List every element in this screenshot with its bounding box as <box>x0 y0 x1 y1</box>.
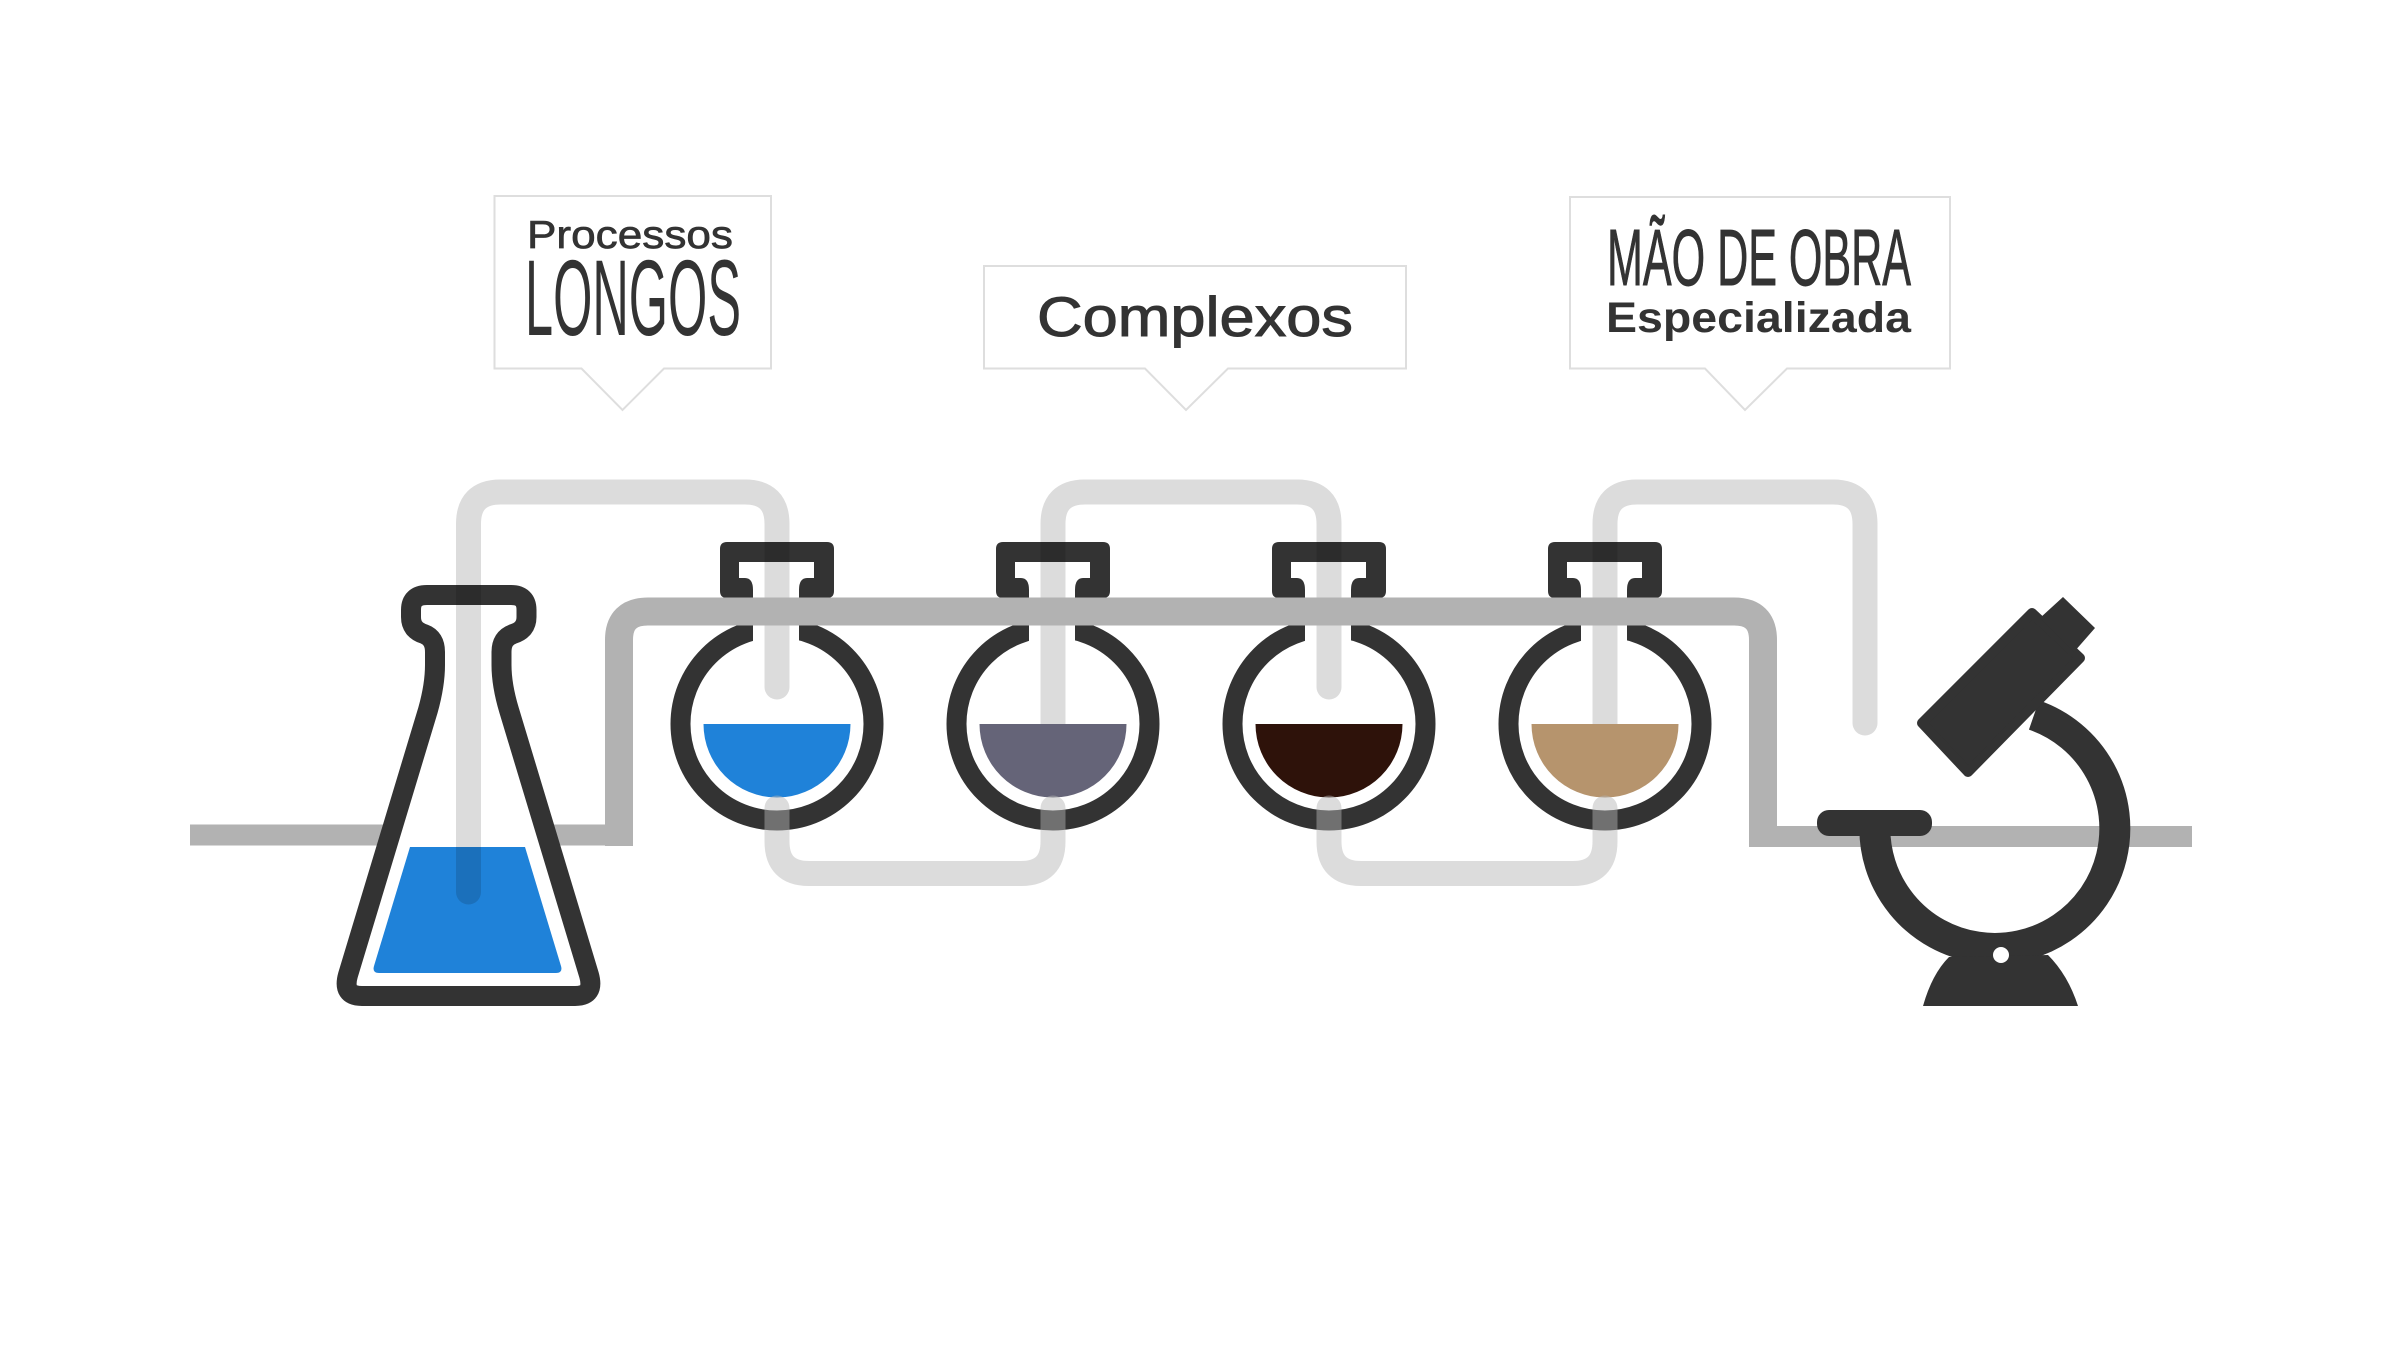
callout: Mão de Obra Especializada: MÃO DE OBRA <box>1607 213 1911 302</box>
liquid: blue <box>704 724 850 798</box>
icon: microscope <box>1817 597 2115 1006</box>
callout: Processos Longos: LONGOS <box>525 237 741 358</box>
process line: lower right segment <box>1749 826 2192 847</box>
tube: flask 3 to flask 4, bottom <box>1329 808 1605 874</box>
process line: lower left segment <box>190 824 633 846</box>
liquid: tan <box>1532 724 1678 798</box>
icon: conical flask with blue liquid <box>347 595 590 996</box>
icon: round flask 2 <box>956 542 1150 820</box>
icon: round flask 1 <box>680 542 874 820</box>
tube: conical flask to flask 1 <box>468 492 777 892</box>
callout: Complexos <box>984 266 1406 410</box>
tube: flask 1 to flask 2, bottom <box>777 808 1053 874</box>
process line: upper band with verticals <box>619 612 1763 847</box>
callout: Processos Longos <box>494 196 771 410</box>
icon: round flask 3 <box>1232 542 1426 820</box>
liquid: dark brown <box>1256 724 1402 798</box>
callout: Complexos: Complexos <box>1037 285 1353 348</box>
callout: Processos Longos: Processos <box>527 214 733 257</box>
tube: flask 2 to flask 3 <box>1053 492 1329 724</box>
callout: Mão de Obra Especializada: Especializada <box>1606 294 1912 342</box>
process line: top band over flask necks <box>648 598 1734 626</box>
callout: Mão de Obra Especializada <box>1570 197 1950 410</box>
liquid: grey violet <box>980 724 1126 798</box>
icon: round flask 4 <box>1508 542 1702 820</box>
tube: flask 4 to microscope <box>1605 492 1865 724</box>
